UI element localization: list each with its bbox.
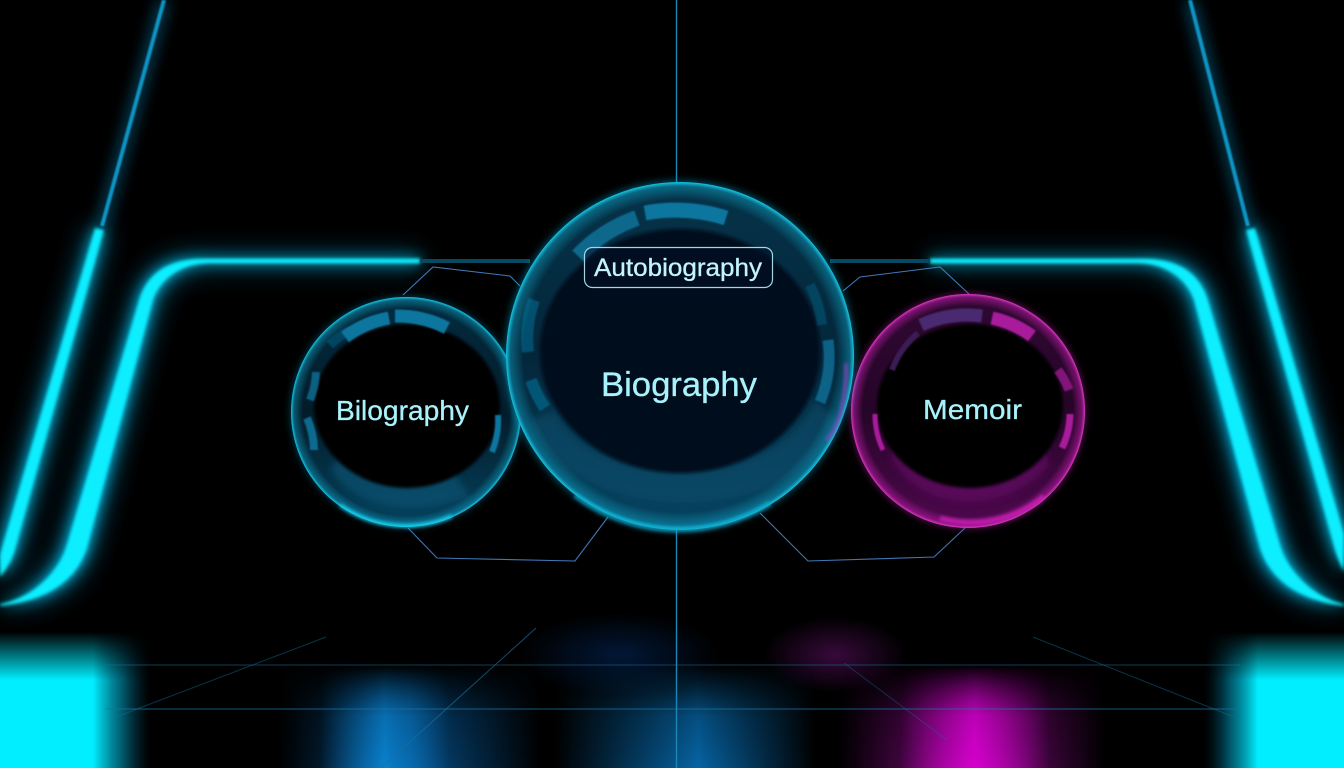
inner disk bbox=[540, 229, 820, 473]
label box: Autobiography bbox=[584, 248, 772, 288]
inner disk bbox=[877, 324, 1063, 488]
floor grid bbox=[105, 628, 1240, 768]
right neon lines bbox=[930, 0, 1344, 606]
left neon lines bbox=[0, 0, 420, 606]
label: Memoir: Memoir bbox=[923, 394, 1022, 425]
inner disk bbox=[314, 324, 500, 488]
central vertical line bbox=[676, 0, 678, 768]
ring segments bbox=[875, 315, 1070, 450]
label box: Autobiography: Autobiography bbox=[594, 254, 763, 282]
thin connector outlines bbox=[403, 267, 970, 561]
floor reflections bbox=[0, 613, 1344, 768]
circle: Biography bbox=[505, 181, 855, 531]
dim horizontal connectors bbox=[420, 259, 930, 263]
circle: Memoir bbox=[851, 294, 1085, 528]
ring segments bbox=[307, 316, 498, 452]
label: Bilography: Bilography bbox=[336, 395, 469, 426]
circle: Bilography bbox=[291, 297, 521, 527]
ring segments bbox=[527, 210, 829, 408]
label: Biography: Biography bbox=[601, 366, 757, 404]
magenta rim reflection bbox=[826, 363, 846, 440]
